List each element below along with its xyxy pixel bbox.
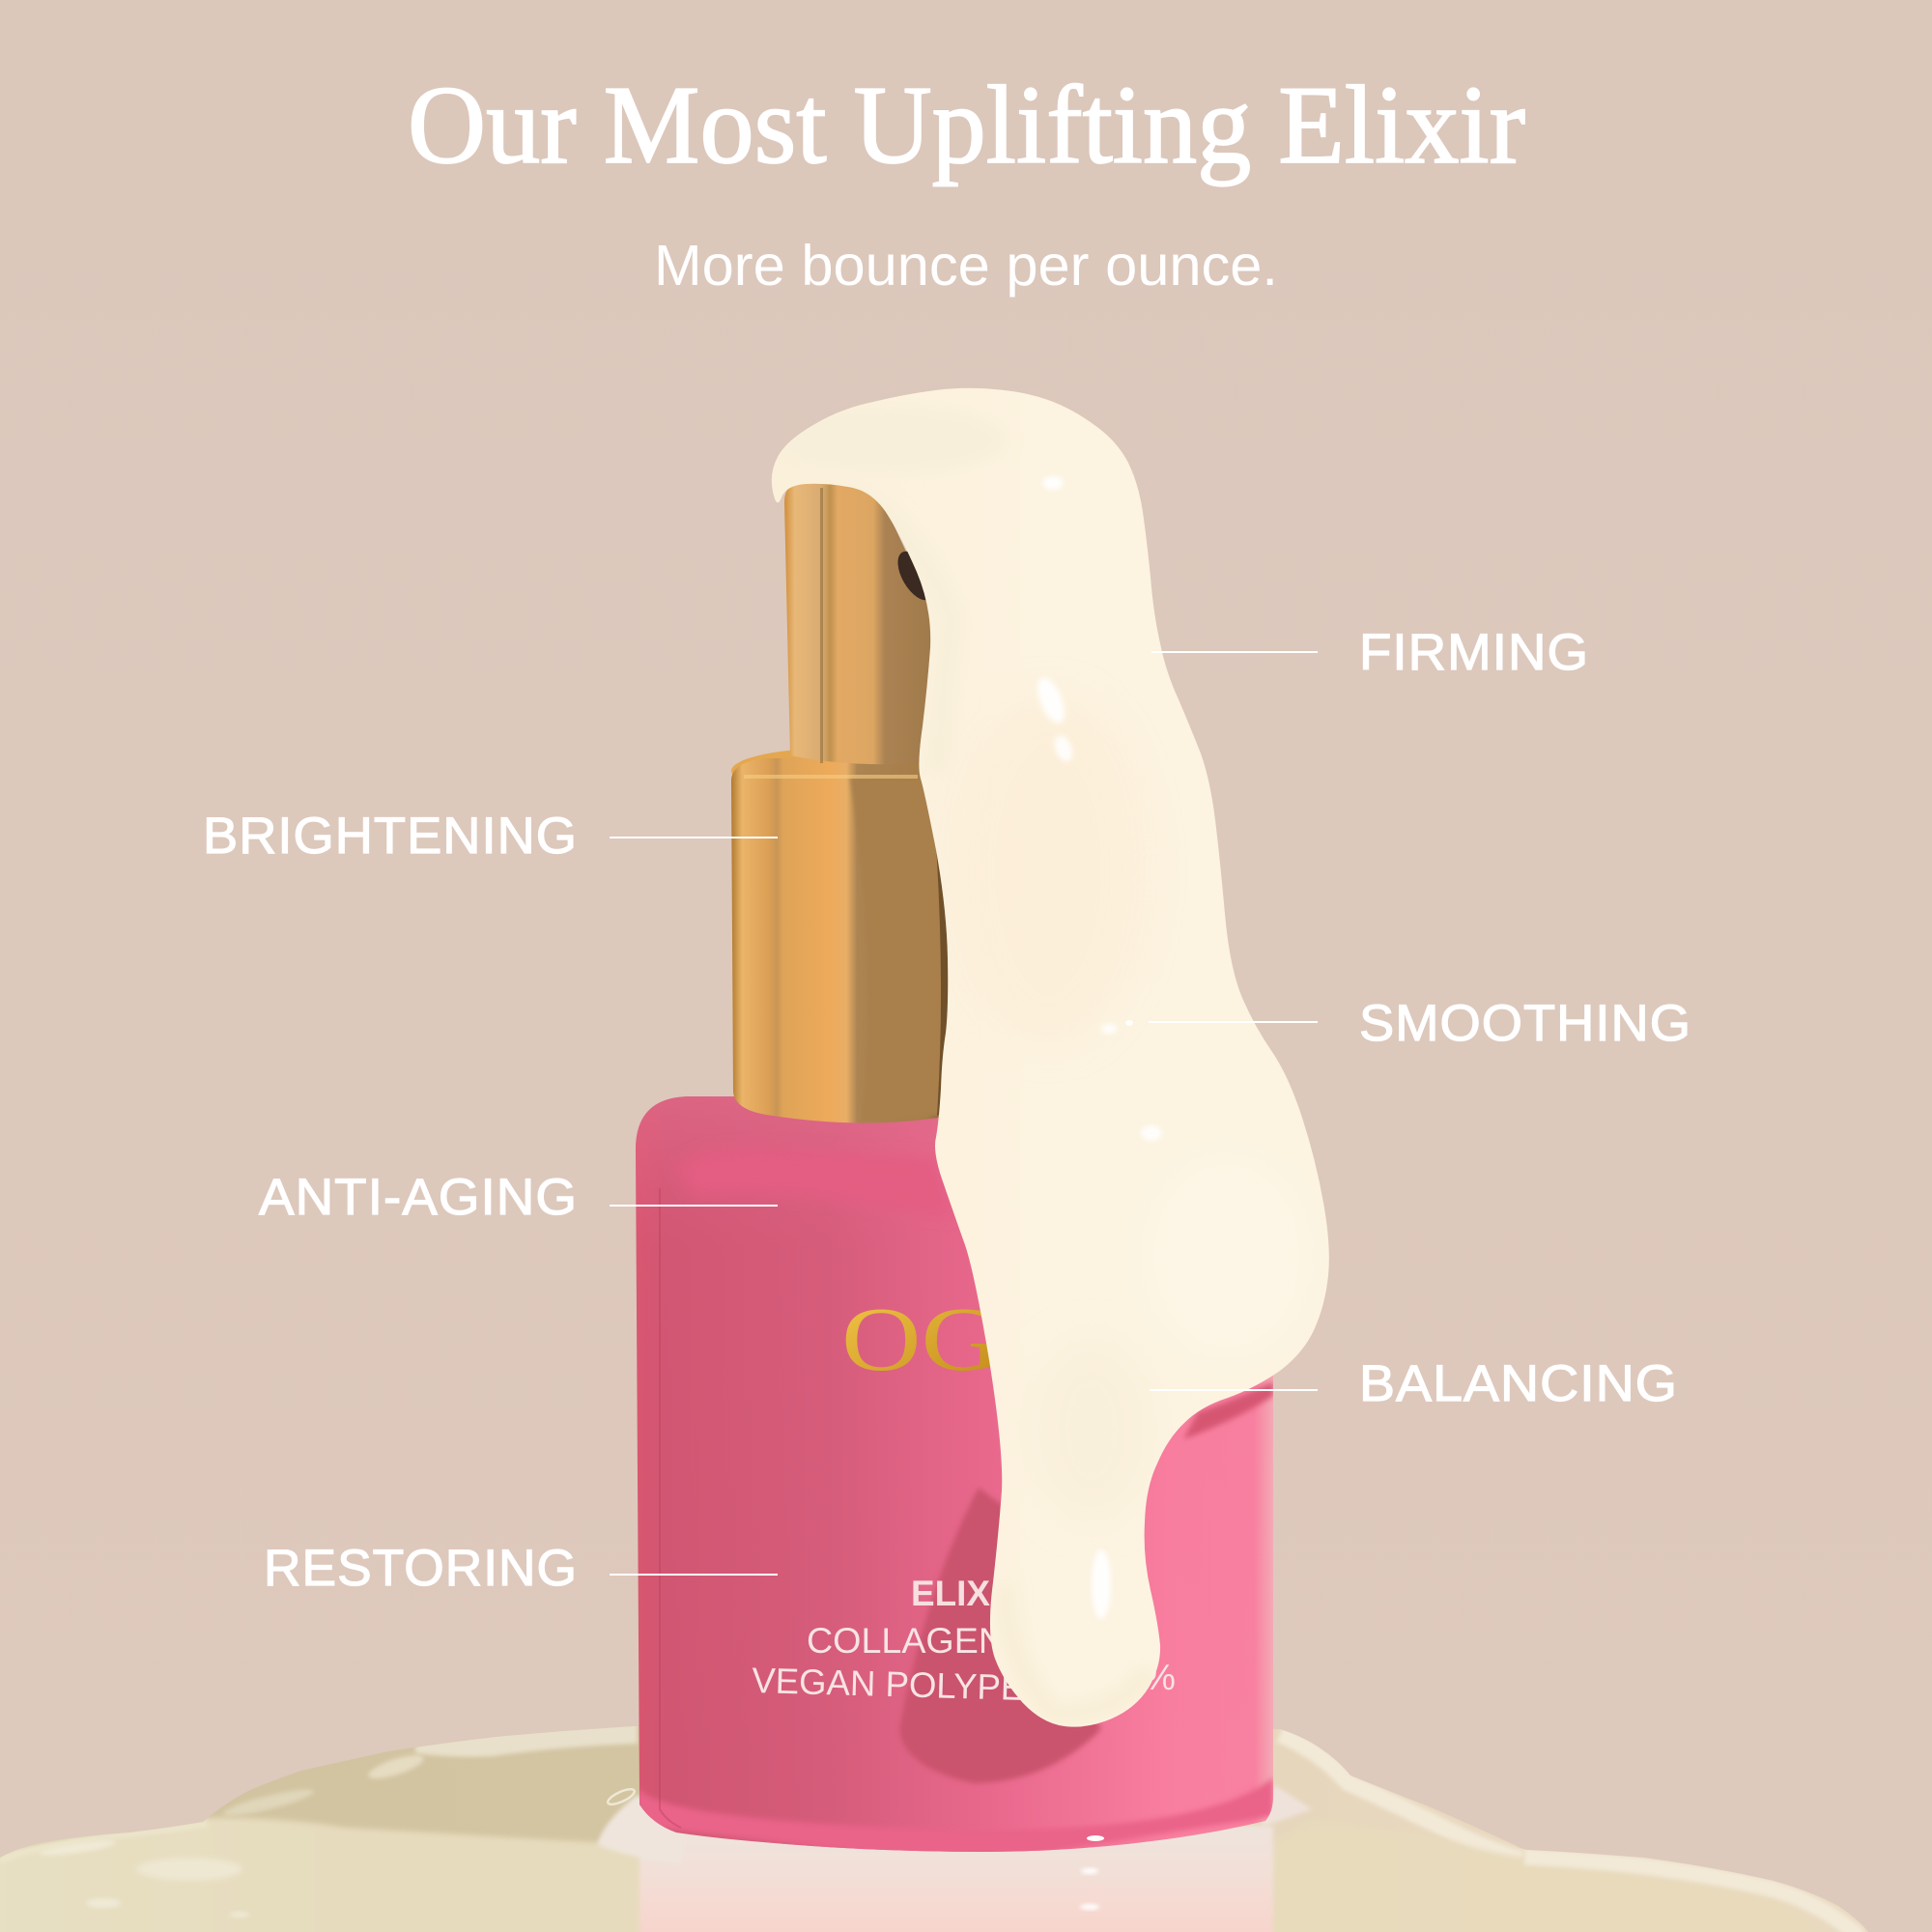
label: collagen line: COLLAGEN [807, 1621, 1005, 1661]
label: percent sign: % [1144, 1658, 1176, 1697]
pool: back lobe and base [0, 1726, 1868, 1932]
label: vegan polypeptide line: VEGAN POLYPE [752, 1661, 1025, 1708]
callout: firming: FIRMING [1359, 624, 1589, 681]
label: product name: ELIX [911, 1574, 990, 1613]
callout: restoring: RESTORING [264, 1540, 578, 1597]
callout: anti-aging: ANTI-AGING [259, 1169, 578, 1226]
highlights [1032, 476, 1162, 1619]
callout: brightening: BRIGHTENING [203, 808, 578, 865]
pool: pink reflection [639, 1826, 1273, 1932]
nozzle opening [891, 546, 941, 606]
title: Our Most Uplifting Elixir [408, 64, 1525, 187]
gold pump head [784, 483, 941, 764]
callout: smoothing: SMOOTHING [1359, 995, 1691, 1052]
drip shadow on bottle [899, 1488, 1101, 1783]
label: OG logo: OG [841, 1290, 1001, 1390]
gold collar [731, 748, 950, 1122]
callout: balancing: BALANCING [1359, 1355, 1678, 1412]
subtitle: More bounce per ounce. [654, 234, 1278, 298]
pink bottle [628, 1092, 1285, 1864]
cream pool [0, 1721, 1868, 1932]
pool: front layer [0, 1816, 1522, 1932]
pool: back rim highlights [415, 1721, 638, 1757]
cream drip [772, 388, 1329, 1727]
